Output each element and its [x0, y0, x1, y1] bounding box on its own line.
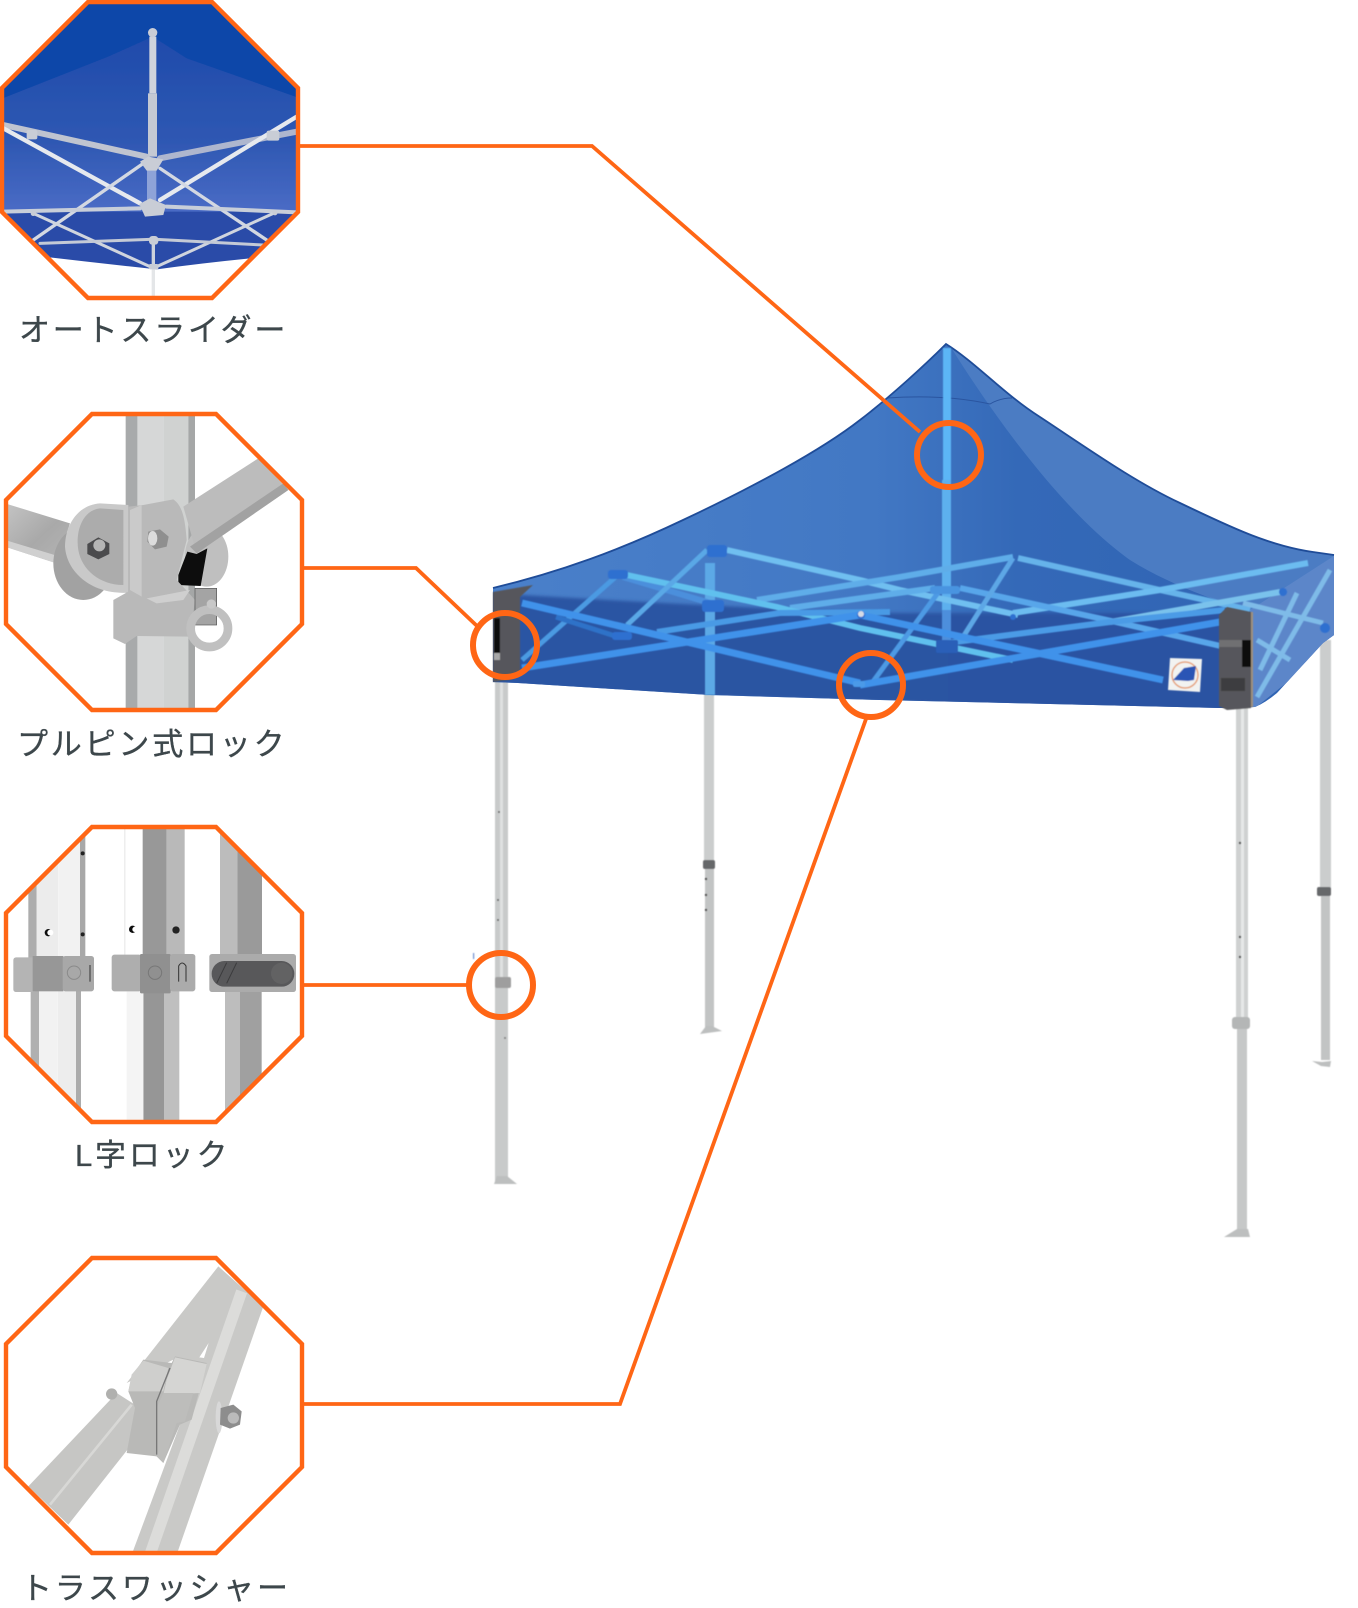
leg: back left — [700, 690, 722, 1034]
panel: auto slider detail — [0, 0, 300, 348]
callout: pull pin — [302, 568, 537, 677]
back truss — [623, 550, 1308, 660]
pole A — [28, 886, 37, 958]
octagon frame — [6, 827, 302, 1122]
leader line — [302, 568, 477, 626]
octagon frame — [2, 2, 298, 298]
tent legs — [473, 640, 1331, 1237]
callout: auto slider — [300, 146, 981, 487]
marker circle — [917, 423, 981, 487]
frame seen through canopy — [522, 348, 1330, 697]
center pole — [942, 348, 951, 640]
leader line — [302, 719, 866, 1404]
left side truss — [522, 550, 1013, 683]
label: トラスワッシャー — [21, 1571, 291, 1606]
label: プルピン式ロック — [17, 727, 287, 762]
callout: L lock — [302, 953, 533, 1017]
corner bracket: left — [493, 585, 533, 682]
photo: underside of canopy — [0, 0, 300, 300]
octagon frame — [6, 1258, 302, 1553]
photo: scissor washer — [28, 1266, 263, 1551]
leg: front right — [1224, 700, 1250, 1237]
corner bracket: right — [1219, 607, 1253, 710]
canopy: right roof panel — [952, 349, 1334, 664]
front truss — [522, 603, 1220, 685]
label: L字ロック — [75, 1138, 230, 1173]
marker circle — [469, 953, 533, 1017]
panel: L lock detail — [0, 820, 307, 1173]
leader line — [300, 146, 920, 432]
canopy: front roof panel — [490, 340, 1340, 715]
leg: back right — [1312, 640, 1331, 1067]
canopy: right side panel — [1250, 556, 1334, 708]
pole C — [220, 827, 237, 957]
panel: truss washer detail — [0, 1251, 307, 1606]
illustration: tent — [473, 340, 1340, 1237]
frame joints — [608, 545, 1330, 687]
octagon frame — [6, 414, 302, 710]
canopy — [490, 340, 1340, 715]
canopy: seam — [887, 397, 1012, 404]
canopy outline — [493, 344, 1334, 588]
callout: truss washer — [302, 653, 903, 1404]
label: オートスライダー — [19, 313, 288, 348]
photo: three lock views — [13, 829, 296, 1120]
logo badge — [1168, 658, 1202, 692]
canopy: valance — [490, 593, 1225, 712]
leader line — [302, 983, 469, 987]
back post — [705, 563, 715, 695]
marker circle — [473, 613, 537, 677]
pole B — [143, 827, 167, 957]
right side truss — [1243, 570, 1330, 697]
photo: pull pin joint — [8, 416, 288, 708]
leg: front left — [473, 680, 517, 1184]
panel: pull pin lock detail — [0, 410, 307, 762]
marker circle — [839, 653, 903, 717]
